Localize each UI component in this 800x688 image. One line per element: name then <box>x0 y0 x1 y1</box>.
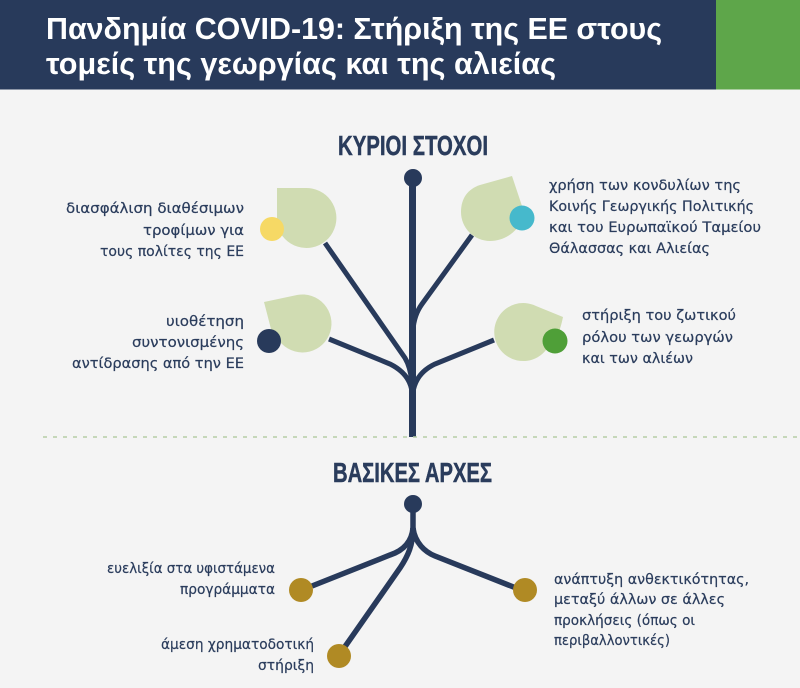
text: direct funding <box>161 637 314 674</box>
text: resilience: μεταξύ άλλων σε άλλες <box>554 592 725 608</box>
text: flexibility <box>107 561 275 598</box>
leaf with green dot <box>494 303 568 361</box>
text: food availability <box>66 201 244 260</box>
text: coordinated response <box>72 314 244 372</box>
text: resilience: ανάπτυξη ανθεκτικότητας, <box>554 572 749 588</box>
tree: main objectives <box>257 169 568 437</box>
text: farmers and fishers role <box>582 308 736 367</box>
text: food availability: διασφάλιση διαθέσιμων <box>66 201 244 217</box>
text: use of funds: και του Ευρωπαϊκού Ταμείου <box>549 220 761 236</box>
text: resilience <box>554 572 749 649</box>
text: direct funding: άμεση χρηματοδοτική <box>161 637 314 653</box>
node: direct funding <box>327 644 351 668</box>
text: use of funds <box>549 178 761 257</box>
text: direct funding: στήριξη <box>258 658 314 674</box>
header banner <box>0 0 800 90</box>
heading: main objectives: ΚΥΡΙΟΙ ΣΤΟΧΟΙ <box>338 130 488 161</box>
text: farmers and fishers role: και των αλιέων <box>582 351 693 367</box>
text: use of funds: χρήση των κονδυλίων της <box>549 178 741 194</box>
heading: basic principles: ΒΑΣΙΚΕΣ ΑΡΧΕΣ <box>333 457 492 488</box>
text: flexibility: ευελιξία στα υφιστάμενα <box>107 561 275 577</box>
node: resilience <box>513 578 537 602</box>
node: flexibility <box>289 578 313 602</box>
text: coordinated response: αντίδρασης από την ΕΕ <box>72 356 244 372</box>
text: coordinated response: συντονισμένης <box>132 335 244 351</box>
text: flexibility: προγράμματα <box>180 582 275 598</box>
leaf with yellow dot <box>260 188 336 248</box>
text: use of funds: Κοινής Γεωργικής Πολιτικής <box>549 199 754 215</box>
leaf with teal dot <box>461 176 534 241</box>
text: resilience: προκλήσεις (όπως οι <box>554 613 695 629</box>
text: coordinated response: υιοθέτηση <box>166 314 244 330</box>
title: Πανδημία COVID-19: Στήριξη της ΕΕ στους <box>46 11 662 46</box>
text: food availability: τροφίμων για <box>143 223 244 239</box>
tree: basic principles <box>289 495 537 668</box>
text: farmers and fishers role: στήριξη του ζωτικού <box>582 308 736 324</box>
text: use of funds: Θάλασσας και Αλιείας <box>549 241 710 257</box>
text: resilience: περιβαλλοντικές) <box>554 633 670 649</box>
title <box>46 11 662 81</box>
leaf with navy dot <box>257 294 331 353</box>
text: food availability: τους πολίτες της ΕΕ <box>100 244 244 260</box>
title: τομείς της γεωργίας και της αλιείας <box>46 46 556 81</box>
text: farmers and fishers role: ρόλου των γεωργών <box>582 330 733 346</box>
